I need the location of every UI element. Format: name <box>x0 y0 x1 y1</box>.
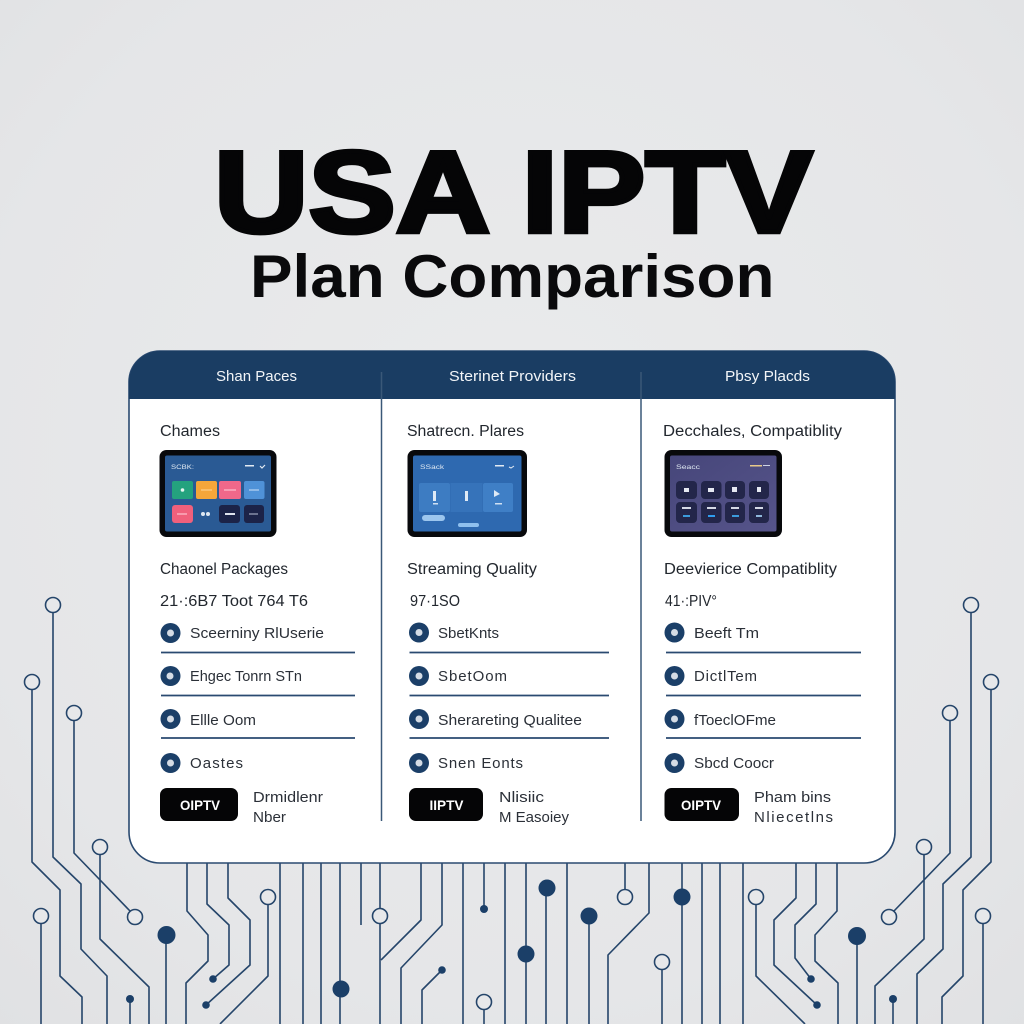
tablet: streaming <box>408 450 527 537</box>
column 3: DictlTem <box>694 668 757 685</box>
badge: OIPTV <box>681 797 722 813</box>
column 1: Chaonel Packages <box>160 561 288 578</box>
column 1: Chames <box>160 423 220 440</box>
column 1: Sceerniny RlUserie <box>190 625 324 642</box>
column 2 <box>407 423 609 826</box>
column 1: Drmidlenr <box>253 789 323 806</box>
column 3: Decchales, Compatiblity <box>663 423 842 440</box>
column 2: 97·1SO <box>410 593 460 610</box>
table header bar: Pbsy Placds <box>725 368 810 385</box>
column 2: Sherareting Qualitee <box>438 712 582 729</box>
column 3: fToeclOFme <box>694 712 776 729</box>
badge <box>160 788 238 821</box>
column 3: 41·:PIV° <box>665 593 717 610</box>
column 2: Nlisiic <box>499 789 545 806</box>
column 2: Streaming Quality <box>407 561 537 578</box>
column 3: Nliecetlns <box>754 809 833 826</box>
title: USA IPTV <box>214 128 812 257</box>
column 2: M Easoiey <box>499 809 569 826</box>
column 1: Ehgec Tonrn STn <box>190 668 302 685</box>
column 1: Ellle Oom <box>190 712 256 729</box>
badge: IIPTV <box>430 797 464 813</box>
tablet: devices: Seacc <box>676 465 700 471</box>
column 2: Shatrecn. Plares <box>407 423 524 440</box>
column 2: SbetKnts <box>438 625 499 642</box>
tablet: devices <box>664 450 782 537</box>
column 3: Beeft Tm <box>694 625 759 642</box>
badge: OIPTV <box>180 797 221 813</box>
tablet: streaming: SSack <box>420 465 445 471</box>
table header bar: Shan Paces <box>216 368 297 385</box>
comparison card <box>129 351 895 863</box>
column 3 <box>663 423 861 826</box>
column 3: Deevierice Compatiblity <box>664 561 837 578</box>
badge <box>409 788 483 821</box>
column 2: Snen Eonts <box>438 755 523 772</box>
column 1: Oastes <box>190 755 243 772</box>
tablet: channel grid <box>160 450 276 537</box>
table header bar <box>129 351 895 399</box>
tablet: channel grid: SCBK: <box>171 465 194 471</box>
column 1: 21·:6B7 Toot 764 T6 <box>160 593 308 610</box>
badge <box>664 788 739 821</box>
column dividers <box>382 372 641 821</box>
column 1 <box>160 423 355 826</box>
table header bar: Sterinet Providers <box>449 368 576 385</box>
column 3: Sbcd Coocr <box>694 755 774 772</box>
subtitle: Plan Comparison <box>250 244 774 311</box>
column 3: Pham bins <box>754 789 831 806</box>
column 2: SbetOom <box>438 668 507 685</box>
column 1: Nber <box>253 809 286 826</box>
circuit board traces <box>24 598 998 1024</box>
